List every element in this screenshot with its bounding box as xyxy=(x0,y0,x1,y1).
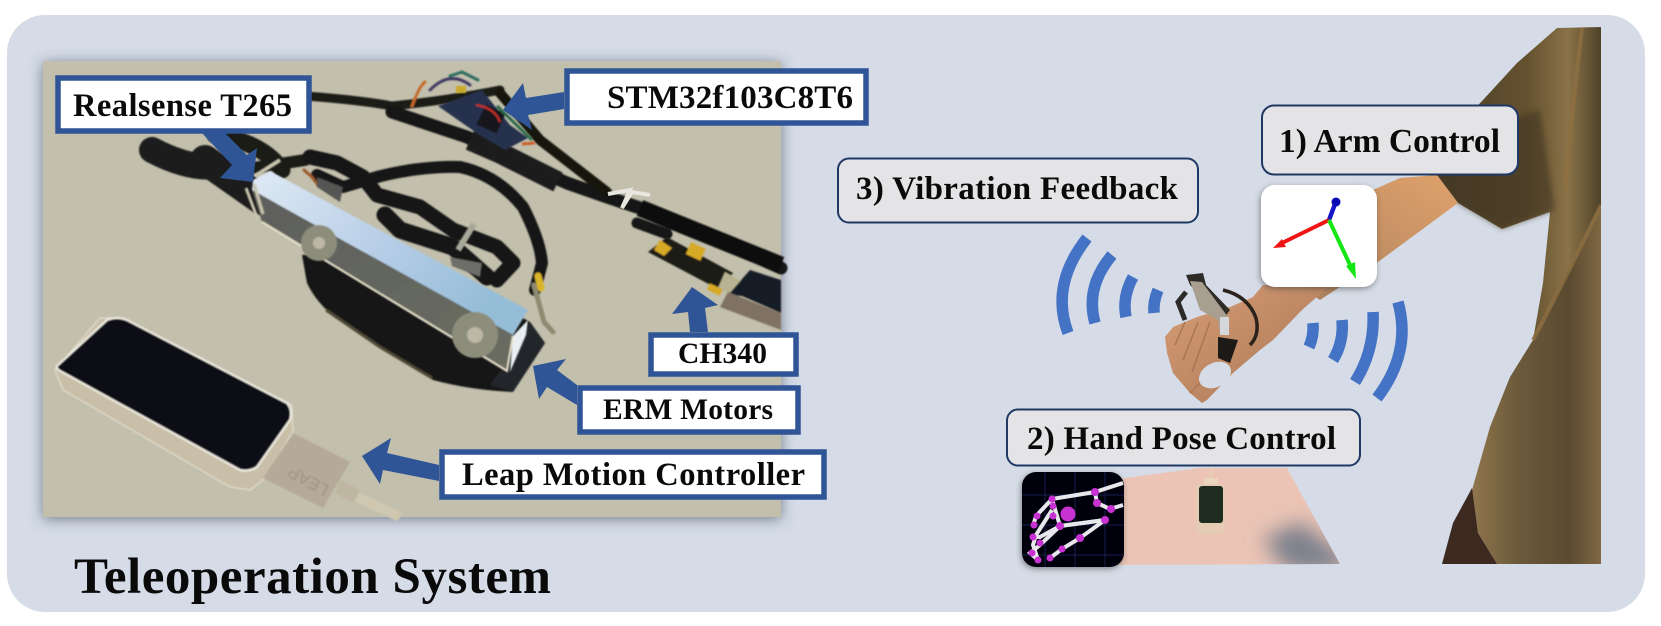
mat shadow xyxy=(1262,522,1345,572)
label: CH340: CH340 xyxy=(678,338,767,370)
title: Teleoperation System xyxy=(74,549,551,605)
cable tie xyxy=(608,190,650,208)
vibration waves: right xyxy=(1309,302,1402,398)
person: forearm and hand xyxy=(1165,285,1327,403)
mat with Leap Motion device xyxy=(1117,468,1340,565)
icon: 3D coordinate axes xyxy=(1261,185,1377,287)
arrow: Leap Motion xyxy=(362,438,439,484)
Leap Motion controller xyxy=(55,318,400,517)
Realsense T265 camera xyxy=(246,160,528,372)
label: ERM Motors xyxy=(580,388,798,432)
label: Leap Motion Controller: Leap Motion Controller xyxy=(462,457,805,493)
label: Realsense T265 xyxy=(58,78,309,131)
icon: hand skeleton tracking xyxy=(1022,472,1124,567)
label: STM32f103C8T6: STM32f103C8T6 xyxy=(607,80,853,116)
label: Realsense T265: Realsense T265 xyxy=(73,88,292,124)
label: CH340 xyxy=(651,335,796,374)
strap xyxy=(302,250,545,392)
axis: green xyxy=(1329,220,1356,279)
wrist device xyxy=(1178,273,1257,363)
shirt: lower body xyxy=(1472,205,1601,564)
cables and wiring xyxy=(152,72,781,332)
label: 2) Hand Pose Control: 2) Hand Pose Control xyxy=(1027,421,1336,457)
label: 1) Arm Control: 1) Arm Control xyxy=(1279,123,1500,160)
person: upper arm xyxy=(1290,175,1458,300)
STM32 control board xyxy=(438,86,535,150)
arrow: STM32 xyxy=(503,83,564,130)
joints xyxy=(1028,488,1115,564)
vibration waves: left xyxy=(1062,238,1158,333)
arrow: ERM Motors xyxy=(533,359,577,405)
label: 3) Vibration Feedback: 3) Vibration Feedback xyxy=(856,171,1179,207)
hand opening xyxy=(1194,356,1236,394)
arrow: Realsense T265 xyxy=(202,133,257,182)
axis: blue xyxy=(1329,198,1340,220)
label: 1) Arm Control xyxy=(1262,106,1518,174)
tracking grid xyxy=(1022,472,1124,567)
CH340 USB module xyxy=(648,237,781,330)
label: 2) Hand Pose Control xyxy=(1007,410,1360,466)
shirt: upper sleeve xyxy=(1437,27,1601,340)
arrow: CH340 xyxy=(672,287,718,332)
bones xyxy=(1030,483,1123,560)
person: torso and shirt xyxy=(1437,27,1601,564)
axis: red xyxy=(1273,220,1329,248)
Leap device on mat xyxy=(1196,468,1225,534)
shirt folds xyxy=(1533,28,1601,340)
sleeve shadow xyxy=(1437,110,1555,229)
photo panel: hardware components xyxy=(43,61,781,517)
label: ERM Motors: ERM Motors xyxy=(603,394,773,426)
LEAP lettering: LEAP xyxy=(285,462,332,499)
label: 3) Vibration Feedback xyxy=(838,158,1198,222)
label: STM32f103C8T6 xyxy=(567,71,866,123)
pants xyxy=(1442,488,1497,564)
finger creases xyxy=(1175,322,1210,393)
